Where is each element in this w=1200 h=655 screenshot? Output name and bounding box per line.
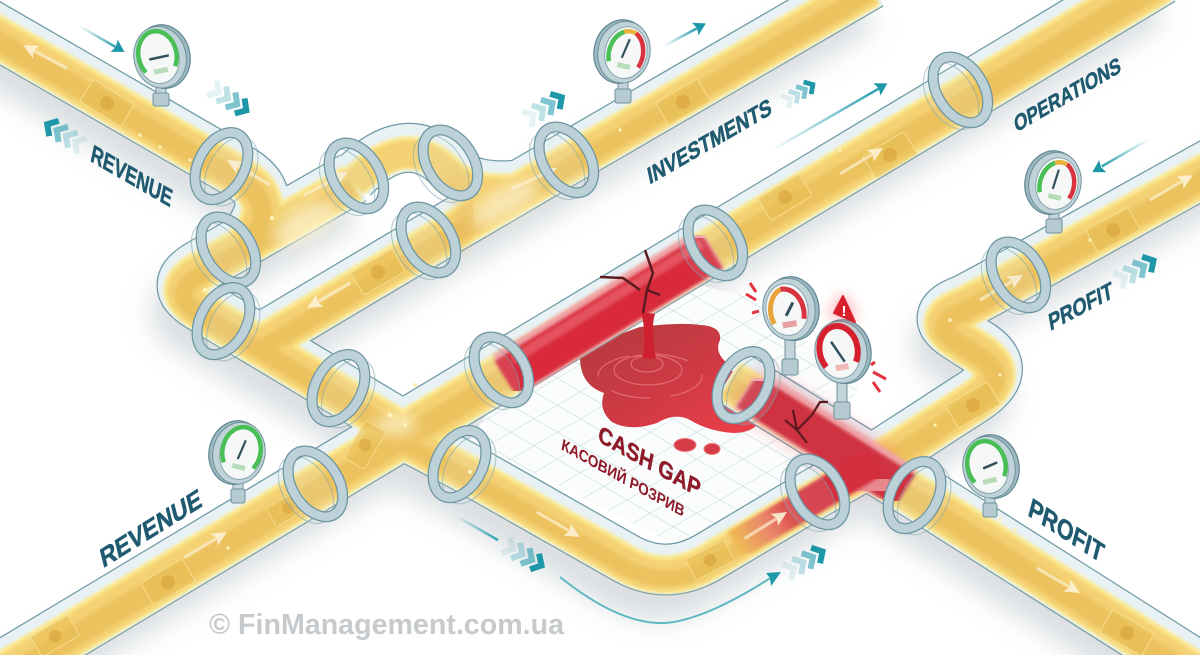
- gauge: top investments: [588, 15, 656, 103]
- watermark: © FinManagement.com.ua: [209, 609, 565, 641]
- pipe flanges: [180, 46, 1058, 544]
- label: CASH GAP: CASH GAP: [596, 421, 703, 502]
- puddle ripples: [598, 354, 702, 398]
- gauge: top left revenue: [128, 20, 196, 106]
- label: revenue bottom: REVENUE: [98, 484, 205, 574]
- orange stream at upper junction: [448, 175, 466, 245]
- warning gauge left: [758, 272, 824, 375]
- red alarm ticks: [746, 283, 886, 392]
- label: revenue top: REVENUE: [89, 140, 175, 212]
- red stream from crack: [641, 312, 656, 358]
- warning triangle: [828, 292, 858, 322]
- gauge: right profit: [1019, 146, 1087, 233]
- label: profit right: PROFIT: [1047, 277, 1115, 336]
- pale glowing fluid at junctions: [266, 171, 547, 435]
- upper red pipe segment: [505, 243, 712, 378]
- teal line arrows: [76, 17, 1153, 541]
- teal chevrons: [42, 79, 1158, 580]
- crack in lower pipe: [785, 402, 828, 443]
- label: CASH GAP: КАСОВИЙ РОЗРИВ: [560, 435, 686, 521]
- warning gauge right: [810, 315, 876, 419]
- crack in upper pipe: [600, 250, 660, 313]
- warning triangle: !: [842, 303, 846, 320]
- red puddle: [580, 324, 760, 433]
- red drops: [674, 438, 720, 454]
- label: operations: OPERATIONS: [1012, 52, 1123, 138]
- sparkles: [138, 128, 1092, 550]
- curved teal arrow: [560, 572, 781, 623]
- floor grid under the leak: [470, 270, 860, 548]
- label: investments: INVESTMENTS: [645, 93, 774, 190]
- gauge: bottom right profit: [957, 430, 1025, 517]
- label: profit bottom: PROFIT: [1026, 493, 1107, 569]
- lower red pipe segment: [735, 387, 905, 545]
- gauge: bottom left revenue: [203, 416, 271, 503]
